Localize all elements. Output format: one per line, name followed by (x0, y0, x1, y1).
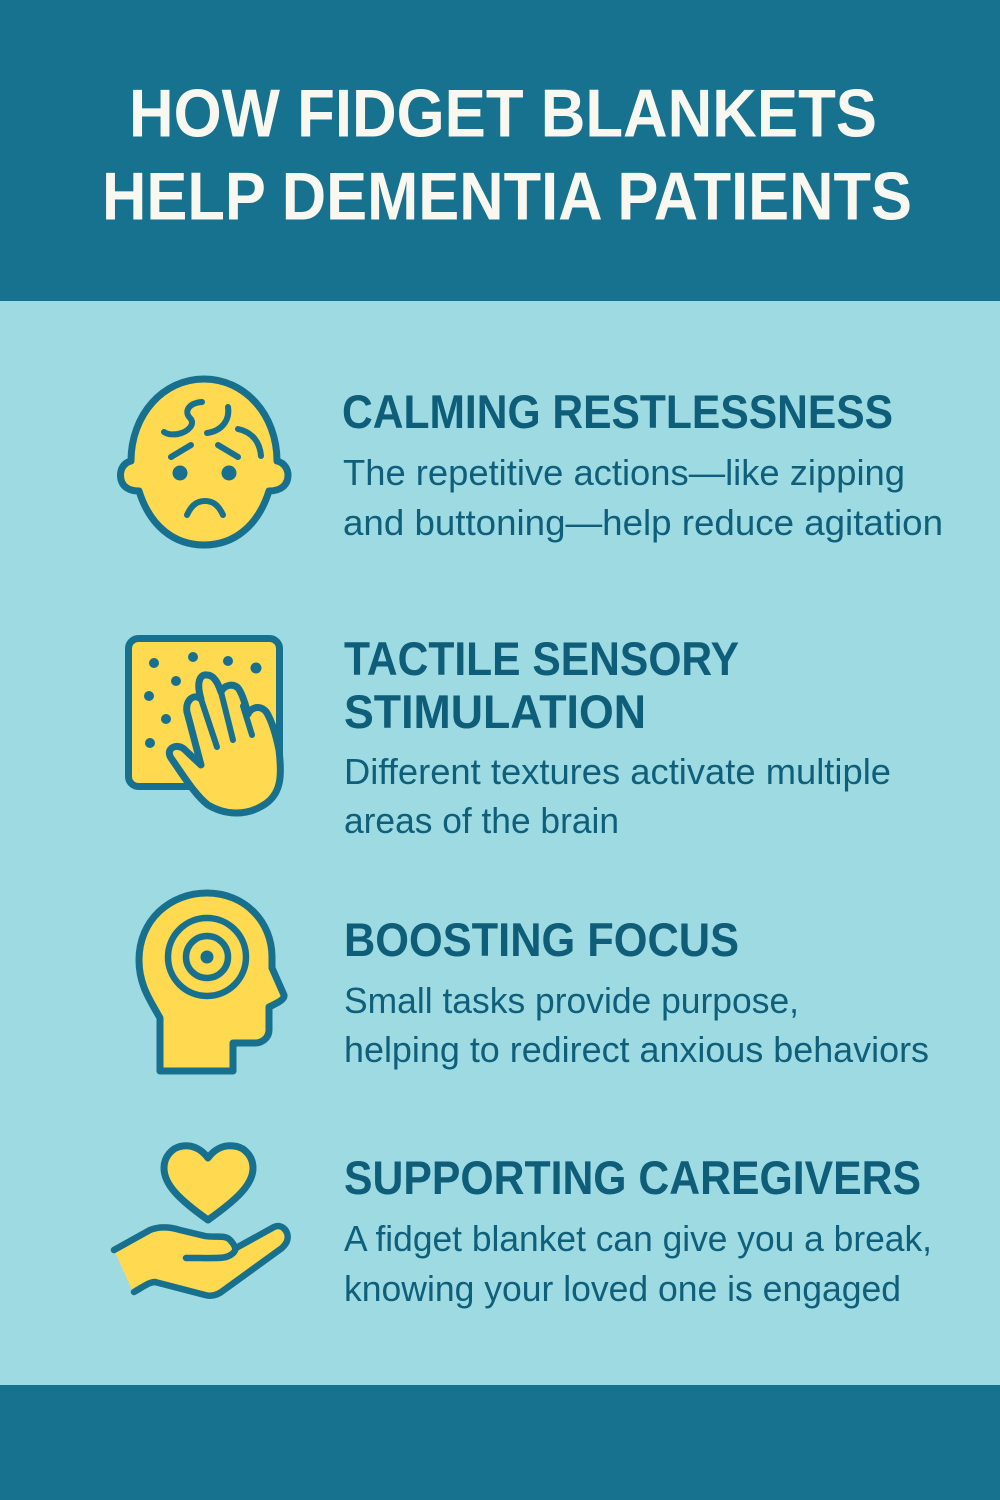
description (343, 452, 943, 543)
heading: SUPPORTING CAREGIVERS (344, 1151, 921, 1204)
heading: BOOSTING FOCUS (344, 913, 739, 966)
description: The repetitive actions—like zipping (343, 452, 905, 493)
description: helping to redirect anxious behaviors (344, 1029, 929, 1070)
description: and buttoning—help reduce agitation (343, 502, 943, 543)
description: A fidget blanket can give you a break, (344, 1218, 932, 1259)
description: Different textures activate multiple (344, 751, 891, 792)
title: HOW FIDGET BLANKETS (129, 76, 877, 152)
description: knowing your loved one is engaged (344, 1268, 901, 1309)
heading: TACTILE SENSORY (344, 632, 739, 685)
panel: calming restlessness (120, 379, 943, 545)
icon: head with target (139, 893, 284, 1071)
description (344, 980, 929, 1070)
panel: boosting focus (139, 893, 929, 1071)
title (102, 76, 912, 234)
title: HELP DEMENTIA PATIENTS (102, 158, 912, 234)
description (344, 1218, 932, 1309)
icon: heart above open hand (114, 1146, 288, 1296)
icon: hand on textured square (128, 638, 280, 813)
icon: worried face (120, 379, 288, 545)
panel: supporting caregivers (114, 1146, 932, 1309)
header band (0, 0, 1000, 301)
description: areas of the brain (344, 800, 619, 841)
description: Small tasks provide purpose, (344, 980, 799, 1021)
description (344, 751, 891, 841)
panel: tactile sensory stimulation (128, 632, 891, 841)
footer band (0, 1385, 1000, 1500)
heading: CALMING RESTLESSNESS (342, 385, 893, 438)
heading: STIMULATION (344, 685, 646, 738)
heading (344, 632, 739, 738)
